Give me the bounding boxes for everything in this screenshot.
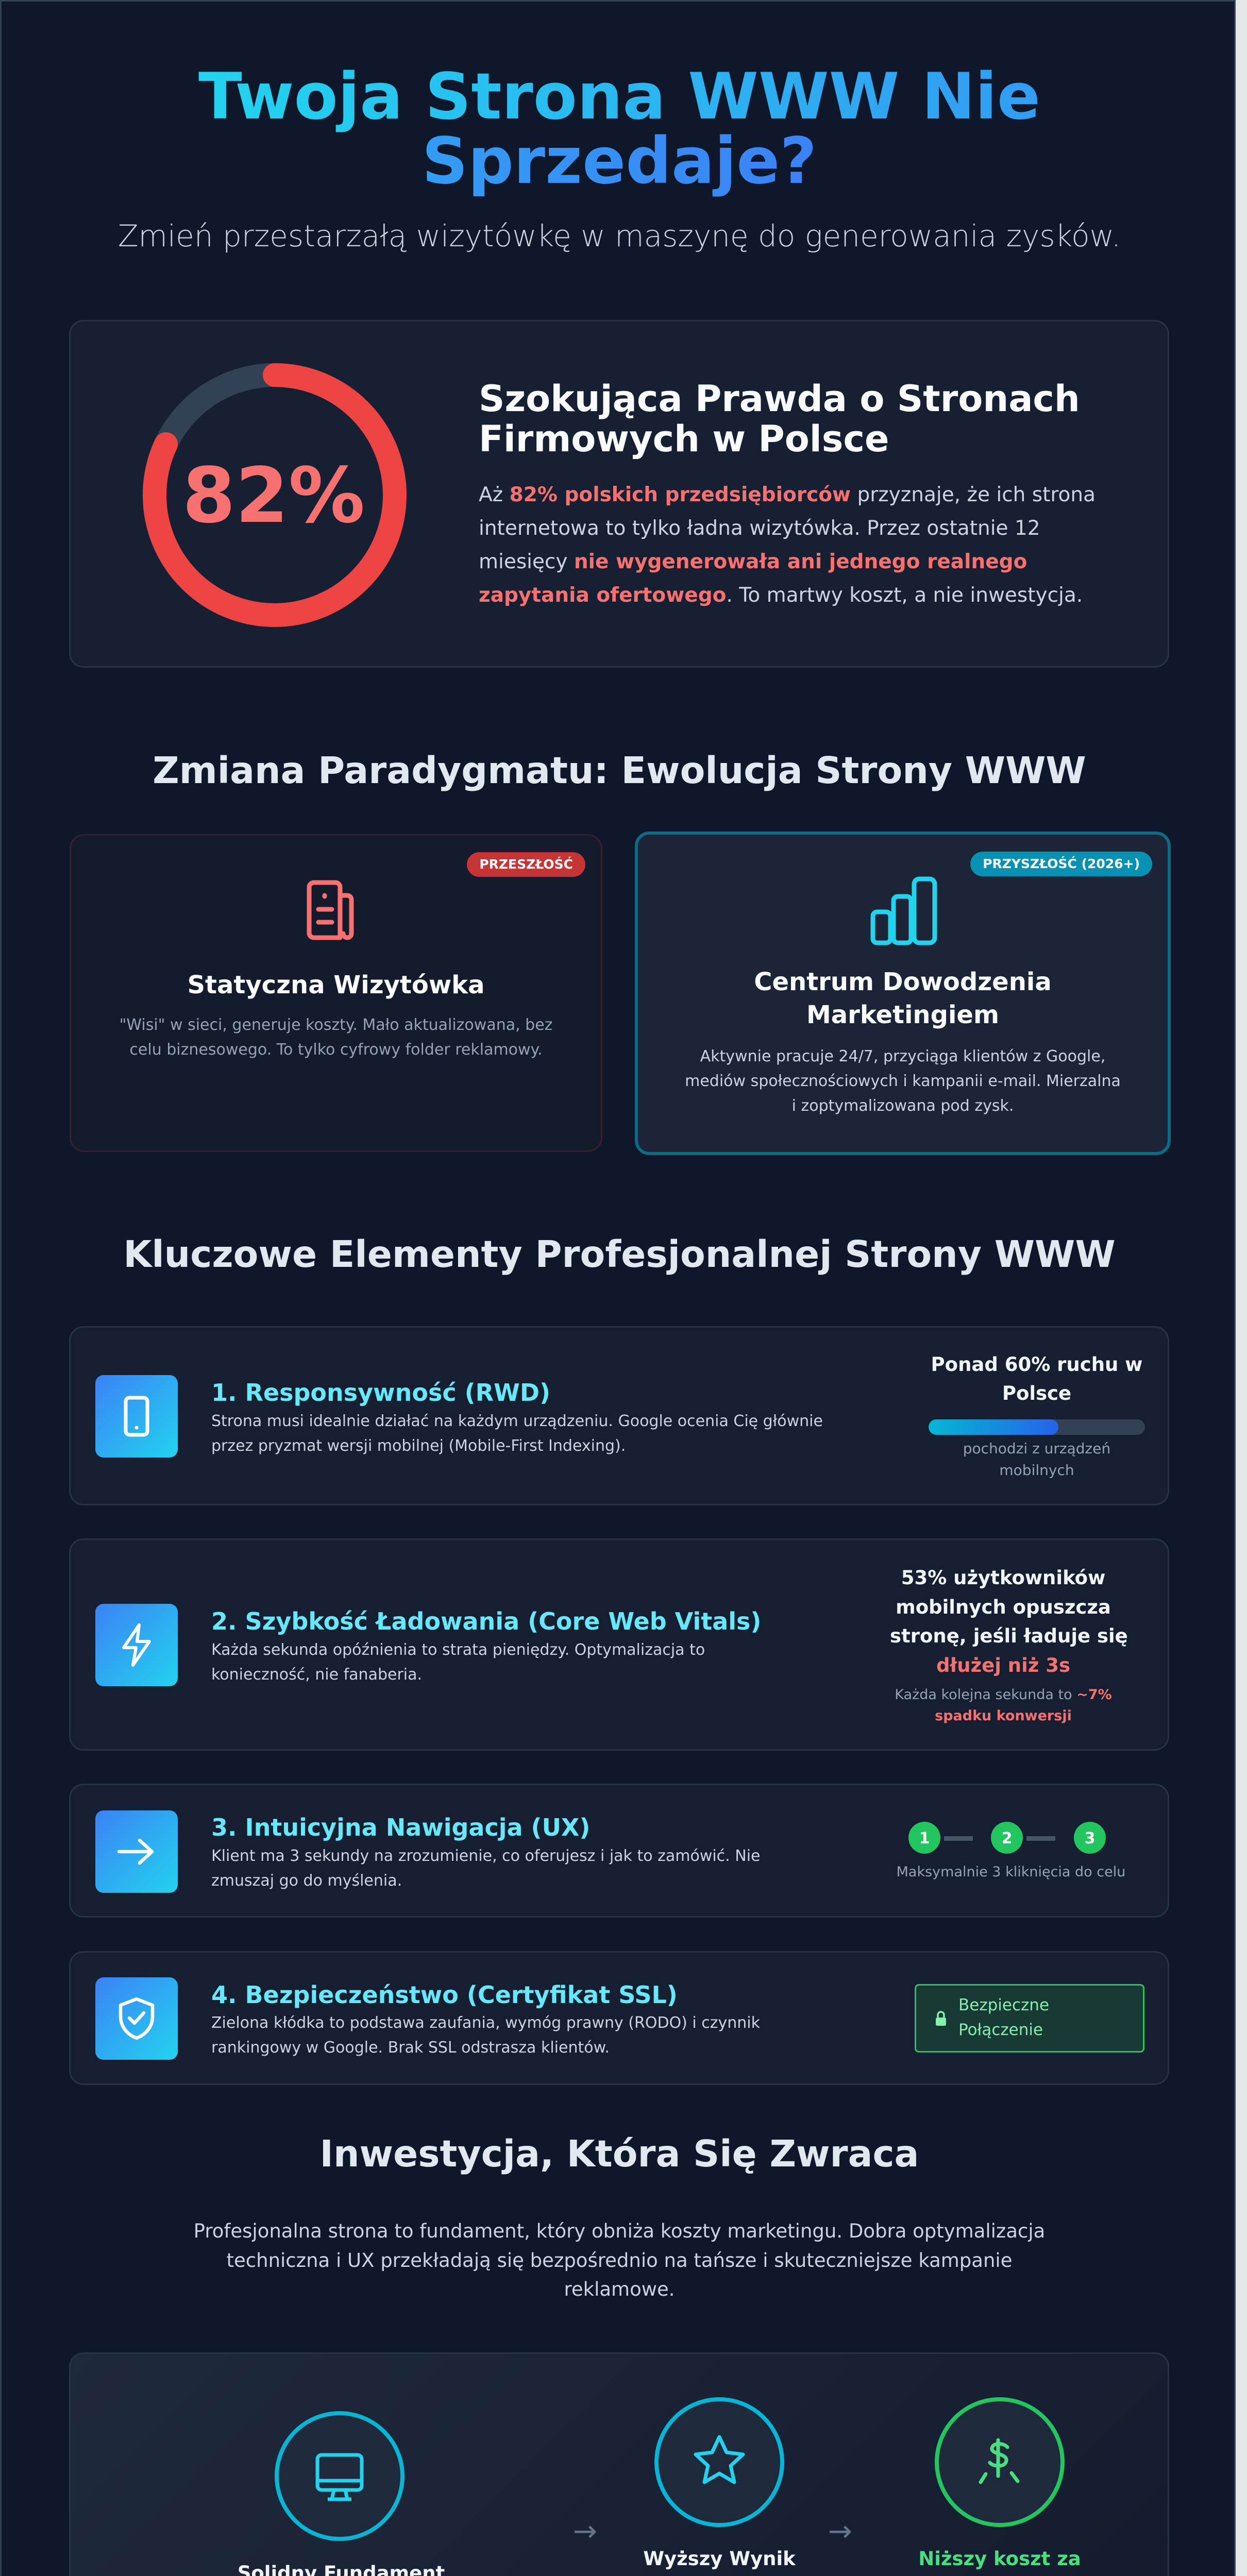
heading: shocking truth: Firmowych w Polsce: [479, 418, 889, 460]
title: command center: Marketingiem: [806, 1001, 999, 1029]
label: lower cost: Niższy koszt za: [918, 2548, 1081, 2570]
arrow 2: →: [828, 2515, 852, 2548]
badge: secure connection: Bezpieczne: [958, 1996, 1049, 2014]
arrow 1: →: [573, 2515, 597, 2548]
text: command center: Aktywnie pracuje 24/7, przyciąga klientów z Google,: [700, 1047, 1105, 1065]
steps: 3 clicks: 3: [1085, 1829, 1095, 1848]
stat: mobile traffic: Polsce: [1002, 1382, 1071, 1404]
text: shocking truth: internetowa to tylko ładna wizytówka. Przez ostatnie 12: [479, 517, 1040, 540]
text: investment: Profesjonalna strona to fundament, który obniża koszty marketingu. Dobra optymalizacja: [194, 2220, 1045, 2242]
badge: secure connection: Połączenie: [958, 2021, 1043, 2039]
text: investment: [2, 2217, 1237, 2304]
text: responsiveness: [211, 1412, 823, 1455]
step 1: foundation: [71, 2354, 586, 2576]
badge: secure connection: [915, 1984, 1144, 2053]
title: Sprzedaje?: [422, 124, 817, 198]
text: command center: mediów społecznościowych i kampanii e-mail. Mierzalna: [685, 1072, 1121, 1090]
text: speed: konieczność, nie fanaberia.: [211, 1666, 422, 1684]
text: security: [211, 2011, 760, 2060]
text: command center: [685, 1047, 1121, 1115]
heading: key elements: Kluczowe Elementy Profesjonalnej Strony WWW: [123, 1233, 1116, 1276]
stat: mobile traffic: mobilnych: [999, 1462, 1074, 1479]
text: command center: i zoptymalizowana pod zysk.: [792, 1097, 1014, 1115]
badge: past: PRZESZŁOŚĆ: [479, 857, 573, 872]
icon: bar chart: [871, 877, 937, 945]
title: [198, 60, 1040, 198]
text: navigation: [211, 1847, 760, 1890]
donut chart 82%: [143, 363, 407, 627]
heading: shocking truth: Szokująca Prawda o Stronach: [479, 378, 1080, 420]
heading: shocking truth: [479, 378, 1080, 460]
icon: dollar: [934, 2397, 1065, 2528]
badge: past: [467, 852, 585, 877]
title: navigation: 3. Intuicyjna Nawigacja (UX): [211, 1814, 590, 1841]
text: speed: [211, 1641, 705, 1684]
text: investment: techniczna i UX przekładają się bezpośrednio na tańsze i skuteczniejsze kampanie: [227, 2249, 1012, 2271]
donut chart 82%: 82%: [182, 451, 365, 540]
text: responsiveness: Strona musi idealnie działać na każdym urządzeniu. Google ocenia Cię głównie: [211, 1412, 823, 1430]
icon: lightning: [95, 1604, 178, 1686]
steps: 3 clicks: 2: [1002, 1829, 1012, 1848]
text: static card: [120, 1016, 552, 1059]
stat: mobile traffic: pochodzi z urządzeń: [963, 1440, 1110, 1457]
text: static card: celu biznesowego. To tylko cyfrowy folder reklamowy.: [129, 1041, 543, 1059]
title: command center: Centrum Dowodzenia: [754, 968, 1052, 996]
title: speed: 2. Szybkość Ładowania (Core Web Vitals): [211, 1607, 761, 1635]
title: command center: [754, 968, 1052, 1029]
heading: paradigm: Zmiana Paradygmatu: Ewolucja Strony WWW: [153, 749, 1086, 792]
steps: 3 clicks: 1: [919, 1829, 930, 1848]
panel: past: [70, 834, 602, 1152]
icon: document: [307, 880, 353, 940]
text: navigation: Klient ma 3 sekundy na zrozumienie, co oferujesz i jak to zamówić. Nie: [211, 1847, 760, 1865]
panel: shocking truth: [69, 320, 1169, 668]
text: shocking truth: [479, 483, 1096, 607]
stat: mobile traffic: [929, 1353, 1145, 1479]
text: security: rankingowy w Google. Brak SSL odstrasza klientów.: [211, 2039, 610, 2057]
text: navigation: zmuszaj go do myślenia.: [211, 1872, 402, 1890]
text: investment: reklamowe.: [564, 2278, 675, 2300]
text: responsiveness: przez pryzmat wersji mobilnej (Mobile-First Indexing).: [211, 1437, 626, 1455]
panel: investment flow: [69, 2352, 1169, 2576]
panel: navigation: [69, 1784, 1169, 1918]
heading: investment: Inwestycja, Która Się Zwraca: [320, 2132, 919, 2175]
steps: 3 clicks: Maksymalnie 3 kliknięcia do celu: [897, 1864, 1125, 1880]
icon: monitor: [274, 2411, 405, 2541]
icon: shield: [95, 1977, 178, 2060]
step 2: quality score: [586, 2354, 854, 2576]
panel: security: [69, 1951, 1169, 2085]
badge: future: PRZYSZŁOŚĆ (2026+): [983, 856, 1140, 871]
text: shocking truth: miesięcy nie wygenerowała ani jednego realnego: [479, 550, 1027, 573]
icon: phone: [95, 1375, 178, 1458]
stat: 53% users: dłużej niż 3s: [936, 1654, 1070, 1676]
bar: 60%: [929, 1419, 1145, 1435]
step 3: lower cost: [864, 2354, 1137, 2576]
title: security: 4. Bezpieczeństwo (Certyfikat SSL): [211, 1981, 678, 2009]
stat: 53% users: spadku konwersji: [935, 1708, 1072, 1724]
panel: future: [635, 832, 1171, 1155]
text: speed: Każda sekunda opóźnienia to strata pieniędzy. Optymalizacja to: [211, 1641, 705, 1659]
text: security: Zielona kłódka to podstawa zaufania, wymóg prawny (RODO) i czynnik: [211, 2014, 760, 2032]
stat: 53% users: mobilnych opuszcza: [896, 1596, 1111, 1618]
icon: arrow: [95, 1810, 178, 1893]
panel: speed: [69, 1538, 1169, 1751]
stat: 53% users: 53% użytkowników: [901, 1567, 1105, 1589]
label: quality score: Wyższy Wynik: [643, 2548, 796, 2570]
stat: 53% users: [890, 1567, 1128, 1724]
steps: 3 clicks: [897, 1822, 1125, 1880]
subtitle: Zmień przestarzałą wizytówkę w maszynę do generowania zysków.: [118, 218, 1121, 253]
title: Twoja Strona WWW Nie: [198, 60, 1040, 134]
text: shocking truth: Aż 82% polskich przedsiębiorców przyznaje, że ich strona: [479, 483, 1096, 506]
badge: future: [970, 852, 1152, 876]
text: shocking truth: zapytania ofertowego. To martwy koszt, a nie inwestycja.: [479, 584, 1083, 607]
stat: 53% users: Każda kolejna sekunda to ~7%: [895, 1687, 1112, 1703]
panel: responsiveness: [69, 1326, 1169, 1505]
icon: star: [654, 2397, 785, 2528]
title: responsiveness: 1. Responsywność (RWD): [211, 1379, 550, 1406]
title: static card: Statyczna Wizytówka: [187, 971, 484, 999]
stat: 53% users: stronę, jeśli ładuje się: [890, 1625, 1128, 1647]
text: static card: "Wisi" w sieci, generuje koszty. Mało aktualizowana, bez: [120, 1016, 552, 1034]
stat: mobile traffic: Ponad 60% ruchu w: [931, 1353, 1142, 1376]
